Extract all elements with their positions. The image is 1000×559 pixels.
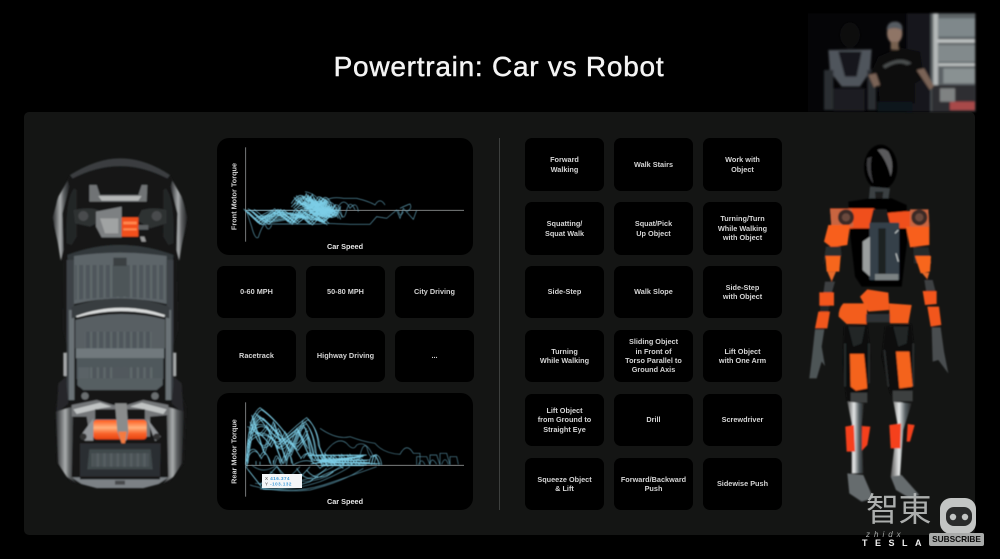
left arm [824, 225, 850, 247]
robot scenario button: Sidewise Push [717, 479, 768, 488]
y axis label: Rear Motor Torque [230, 419, 238, 484]
robot scenario button [525, 138, 604, 191]
subscribe button [929, 533, 984, 546]
car scenario button: Racetrack [239, 351, 274, 360]
robot scenario button: Work with [725, 155, 760, 164]
robot scenario button: from Ground to [538, 415, 591, 424]
robot scenario button: with Object [723, 233, 762, 242]
robot scenario button: Sliding Object [629, 337, 678, 346]
x axis label: Car Speed [327, 497, 363, 506]
axes [246, 147, 464, 242]
subscribe button: SUBSCRIBE [932, 534, 981, 544]
video inset: presenter with robot and car chassis [822, 12, 977, 113]
robot scenario button [525, 458, 604, 510]
robot scenario button: Object [731, 164, 754, 174]
robot scenario button [525, 394, 604, 446]
data tooltip: Y -103.132 [265, 482, 292, 486]
head [864, 145, 897, 190]
car scenario button [395, 330, 474, 382]
car scenario button: Highway Driving [317, 351, 374, 360]
robot scenario button: Forward [550, 155, 579, 164]
robot scenario button: Turning [551, 347, 578, 356]
torque traces [246, 192, 417, 238]
robot scenario button [703, 394, 782, 446]
robot scenario button [614, 138, 693, 191]
robot scenario button [703, 266, 782, 318]
right leg [882, 324, 915, 403]
robot scenario button [703, 202, 782, 255]
panel: slide background [24, 112, 975, 535]
x axis label: Car Speed [327, 242, 363, 251]
robot scenario button [614, 330, 693, 382]
car scenario button [217, 266, 296, 318]
left leg [843, 324, 871, 402]
torso [848, 198, 907, 287]
car torque chart: rear motor [217, 393, 473, 510]
robot scenario button: Ground Axis [632, 365, 675, 374]
robot scenario button [614, 394, 693, 446]
robot scenario button: Up Object [636, 228, 671, 238]
robot scenario button: Squat Walk [545, 228, 584, 238]
car scenario button: 0-60 MPH [240, 287, 273, 296]
car scenario button: 50-80 MPH [327, 287, 364, 296]
robot scenario button: Squat/Pick [635, 219, 672, 228]
torque traces [250, 428, 458, 491]
car scenario button: City Driving [414, 287, 455, 296]
Tesla wordmark: TESLA [862, 538, 929, 548]
robot scenario button [614, 458, 693, 510]
data tooltip: X 416.374 [265, 476, 290, 481]
robot scenario button: Lift Object [546, 406, 583, 415]
robot scenario button: with Object [723, 292, 762, 301]
robot scenario button: Squeeze Object [537, 475, 592, 484]
robot scenario button [703, 330, 782, 382]
robot illustration [808, 144, 948, 502]
robot scenario button [525, 330, 604, 382]
axes [246, 402, 464, 497]
robot scenario button: with One Arm [719, 356, 766, 365]
robot scenario button: Drill [646, 415, 661, 424]
data tooltip [262, 474, 302, 488]
robot scenario button: Walk Stairs [634, 160, 673, 169]
car body silhouette [53, 158, 187, 488]
robot scenario button: Side-Step [726, 283, 759, 292]
robot scenario button: Walking [551, 164, 578, 174]
car scenario button [306, 330, 385, 382]
car scenario button: ... [431, 351, 438, 360]
robot scenario button: Lift Object [724, 347, 761, 356]
car scenario button [395, 266, 474, 318]
robot scenario button [614, 266, 693, 318]
robot scenario button [614, 202, 693, 255]
robot scenario button: While Walking [718, 224, 767, 233]
robot scenario button: Screwdriver [722, 415, 763, 424]
robot scenario button: & Lift [555, 484, 574, 493]
robot scenario button: While Walking [540, 356, 589, 365]
robot scenario button: in Front of [635, 347, 672, 356]
watermark logo [866, 491, 976, 533]
car scenario button [217, 330, 296, 382]
robot scenario button [525, 266, 604, 318]
pelvis [860, 289, 889, 312]
robot scenario button [525, 202, 604, 255]
robot scenario button: Torso Parallel to [625, 356, 682, 365]
robot scenario button: Forward/Backward [621, 475, 686, 484]
robot scenario button [703, 138, 782, 191]
y axis label: Front Motor Torque [230, 163, 238, 230]
title: Powertrain: Car vs Robot [334, 51, 664, 82]
watermark small text: zhidx [866, 530, 905, 539]
robot scenario button: Squatting/ [547, 219, 582, 228]
robot scenario button: Walk Slope [634, 287, 673, 296]
robot scenario button [703, 458, 782, 510]
robot scenario button: Straight Eye [543, 425, 586, 434]
watermark logo: 智東 [866, 491, 931, 528]
car scenario button [306, 266, 385, 318]
car chassis illustration [52, 158, 188, 489]
robot scenario button: Side-Step [548, 287, 581, 296]
robot scenario button: Push [645, 484, 662, 493]
right arm [906, 227, 929, 247]
icon: robot head [940, 498, 976, 533]
robot scenario button: Turning/Turn [720, 214, 765, 223]
car torque chart: front motor [217, 138, 473, 255]
